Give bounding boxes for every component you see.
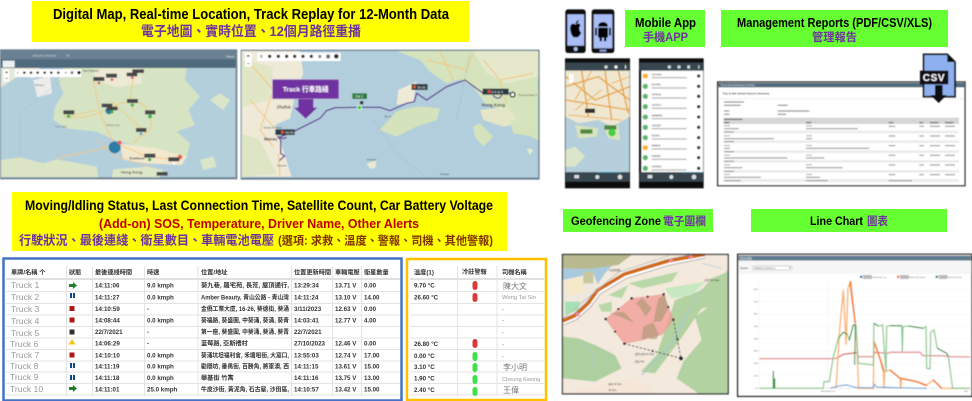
line chart: power signals: 26/1/2022 9:10	[821, 391, 836, 393]
screenshot: track replay map: Car 1	[355, 94, 363, 98]
callout: track route: Track 行車路綫	[283, 85, 329, 94]
alerts header: 司機名稱	[502, 268, 528, 276]
driver names: Wong Tai Sin	[502, 295, 536, 301]
screenshot: trip report: Trip & Idle Detail Report (Vehicle)	[721, 84, 755, 87]
line chart: power signals: 26/1	[964, 391, 969, 393]
map: geofence zone: 北潭 Pak Ngau	[704, 278, 720, 282]
line chart: power signals: 30.0	[754, 351, 759, 353]
line chart: power signals: Signals:	[740, 268, 749, 270]
table values: 14:10:57	[294, 386, 319, 394]
table values: 13.42 V	[335, 386, 357, 394]
line chart: power signals: 50.0	[754, 326, 759, 328]
screenshot: live location map: All	[66, 54, 70, 58]
truck names	[10, 280, 43, 394]
alerts header	[414, 268, 528, 276]
table values: 25.0 kmph	[147, 386, 177, 394]
table header: 車牌/名稱 个	[11, 268, 46, 276]
heading: mobile app: 手機APP	[643, 30, 688, 44]
table values: 12.74 V	[335, 352, 357, 360]
screenshot: track replay map: Coloane	[277, 164, 287, 168]
banner: status heading: Moving/Idling Status, Last Connection Time, Satellite Count, Car Battery Voltage	[25, 198, 493, 213]
truck names: Truck 10	[10, 384, 43, 394]
map: geofence zone: Tai Tam	[608, 390, 616, 392]
table values: 12.63 V	[335, 306, 357, 313]
table values: 14:03:41	[294, 318, 319, 324]
table header: 時速	[147, 268, 160, 276]
driver names: -	[502, 307, 504, 313]
table values: -	[147, 340, 149, 348]
table values: 9.0 kmph	[147, 282, 174, 290]
table values: 12.77 V	[335, 318, 357, 324]
driver names: 王偉	[503, 385, 519, 395]
screenshot: track replay map: Tai O	[384, 114, 392, 118]
icon: iPhone	[565, 9, 586, 53]
table values: 22/7/2021	[294, 329, 322, 336]
screenshot: mobile vehicle list: VN5027	[652, 123, 662, 127]
table values: 14:11:15	[294, 364, 319, 370]
table values	[95, 282, 380, 394]
screenshot: live location map: Hong Kong	[121, 169, 143, 174]
table values: 22/7/2021	[95, 329, 123, 336]
heading: management reports: Management Reports (PDF/CSV/XLS)	[737, 16, 932, 30]
heading: geofencing zone	[563, 209, 713, 232]
table values: 0.0 kmph	[147, 318, 174, 324]
heading: line chart: Line Chart	[810, 214, 863, 228]
heading: line chart	[751, 209, 947, 232]
table header: 衛星數量	[364, 268, 389, 276]
driver names	[502, 281, 540, 395]
screenshot: mobile vehicle list: VP5020	[652, 93, 662, 97]
temperature values: 3.10 °C	[414, 364, 435, 371]
table values: 葵涌坑坦福利會, 禾塘咀街, 大窩口,	[201, 352, 289, 360]
screenshot: live location map: Shekou	[35, 83, 45, 87]
screenshot: mobile vehicle list: VN7671	[652, 103, 662, 107]
line chart: power signals: 70.0	[754, 301, 759, 303]
screenshot: trip report: Trip & Idle Detail Report (Vehicle)	[722, 92, 769, 96]
map: geofence zone: 城門水塘 Kai Shan	[635, 352, 655, 356]
table values: 15.00	[364, 364, 380, 370]
table values: 3/11/2023	[294, 306, 322, 313]
map: geofence zone: 石崗軍營路	[609, 268, 621, 272]
table values: 14:11:18	[95, 375, 120, 382]
screenshot: track replay map: Nossa Senhora	[263, 126, 282, 130]
screenshot: track replay map: Hong Kong	[482, 103, 505, 108]
table values: Amber Beauty, 青山公路 - 青山灣	[201, 294, 289, 302]
table values: 金僑工業大廈, 16-26, 葵德街, 葵涌	[201, 305, 289, 313]
table values: 14:11:19	[95, 364, 120, 370]
table values: 13.75 V	[335, 375, 357, 382]
table values: 14:06:29	[95, 340, 120, 348]
temperature values: 26.80 °C	[414, 341, 439, 348]
screenshot: track replay map: Guishan	[367, 158, 377, 162]
truck names: Truck 6	[10, 339, 39, 349]
table values: 14:10:59	[95, 306, 120, 313]
alerts header: 溫度(1)	[414, 268, 434, 276]
icon: CSV download	[920, 54, 955, 103]
table header: 車輛電壓	[335, 268, 360, 276]
screenshot: live location map: Tuen Mun	[55, 124, 67, 128]
table values: 13:29:34	[294, 282, 319, 290]
table header: 位置/地址	[201, 268, 228, 276]
line chart: power signals: SolarCell_Current_A	[754, 267, 776, 270]
screenshot: live location map: Sai District	[83, 69, 99, 73]
table values: 13:55:03	[294, 352, 319, 360]
truck names: Truck 5	[11, 328, 40, 338]
screenshot: track replay map: Dangan	[440, 172, 450, 176]
table values: 27/10/2023	[294, 340, 326, 348]
truck names: Truck 1	[11, 280, 40, 290]
banner: status heading: (選項: 求救、溫度、警報、司機、其他警報)	[278, 234, 493, 248]
table values: 14:11:24	[294, 294, 319, 302]
screenshot: mobile vehicle list: VN7418	[652, 72, 662, 76]
screenshot: mobile vehicle list: HM308	[652, 154, 661, 158]
panel: add-on alerts table	[407, 259, 546, 400]
driver names: -	[502, 342, 504, 348]
table values: -	[147, 329, 149, 336]
screenshot: trip report	[718, 82, 965, 186]
truck names: Truck 7	[11, 350, 40, 360]
driver names: -	[502, 330, 504, 336]
truck names: Truck 9	[10, 372, 39, 382]
screenshot: track replay map: 3H 9S	[285, 130, 294, 134]
table values: 0.00	[364, 340, 377, 348]
truck names: Truck 4	[11, 316, 40, 326]
alerts header: 冷莊警報	[462, 268, 488, 276]
banner: status heading: (Add-on) SOS, Temperature, Driver Name, Other Alerts	[99, 216, 419, 231]
table values: 牛皮沙街, 黃泥角, 石古壟, 沙田區,	[201, 386, 289, 394]
heading: mobile app	[625, 10, 705, 47]
table values: 葵九巷, 羅宅苑, 長荒, 屋頂通行,	[201, 282, 289, 290]
heading: mobile app: Mobile App	[635, 16, 696, 30]
table values: 14:10:10	[95, 352, 120, 360]
temperature values	[414, 282, 439, 394]
line chart: power signals	[738, 254, 972, 396]
status icons	[68, 282, 77, 392]
banner: status heading: 行駛狀況、最後連綫、衛星數目、車輛電池電壓	[19, 232, 274, 248]
table values: 17.00	[364, 352, 380, 360]
table values: 0.0 kmph	[147, 375, 174, 382]
screenshot: live location map: Sample Customer	[33, 54, 57, 58]
screenshot: mobile vehicle list: MM8058	[652, 113, 663, 117]
driver names: -	[502, 354, 504, 360]
table values: -	[147, 306, 149, 313]
banner: digital map heading	[32, 1, 469, 42]
table values: 14:11:01	[95, 386, 120, 394]
panel: vehicle status table	[4, 258, 402, 400]
screenshot: live location map: Kowloon	[129, 156, 145, 160]
line chart: power signals: 40.0	[754, 338, 759, 340]
table values: 13.10 V	[335, 294, 357, 302]
screenshot: mobile map view	[565, 58, 630, 188]
banner: digital map heading: 電子地圖、實時位置、12個月路徑重播	[141, 23, 361, 39]
chart legend: SolarCell_Power	[909, 276, 926, 279]
screenshot: track replay map	[241, 50, 540, 180]
icon: CSV download: CSV	[923, 73, 945, 84]
chart legend: SolarCell_Curr	[873, 276, 887, 279]
table values: 華基街 竹寓	[201, 374, 234, 382]
table values: 0.0 kmph	[147, 352, 174, 360]
table header: 最後連綫時間	[95, 268, 132, 276]
screenshot: mobile vehicle list: MM816	[652, 144, 661, 148]
truck names: Truck 2	[11, 292, 40, 302]
heading: geofencing zone: 電子圍欄	[663, 214, 706, 228]
screenshot: mobile vehicle list: VN2936	[652, 165, 662, 169]
map: geofence zone: 標高 455	[635, 359, 645, 363]
table values: 15.00	[364, 386, 380, 394]
driver names: Cheung Kwong	[502, 377, 540, 383]
chart legend: SolarCell_Volt	[948, 276, 962, 279]
heading: management reports	[721, 10, 948, 47]
table header	[11, 268, 389, 276]
table values: 14.00	[364, 294, 380, 302]
table values: 13.61 V	[335, 364, 357, 370]
screenshot: mobile vehicle list	[639, 58, 704, 188]
table values: 13.71 V	[335, 282, 357, 290]
line chart: power signals: 10.0	[754, 375, 759, 377]
table values: 12.46 V	[335, 340, 357, 348]
screenshot: track replay map: Macau	[264, 137, 278, 142]
table header: 位置更新時間	[294, 268, 331, 276]
temperature values: 2.40 °C	[414, 387, 435, 394]
line chart: power signals: 圖表視圖	[740, 255, 752, 260]
table values: 蓝莓路, 亞斯禮村	[201, 340, 249, 348]
heading: geofencing zone: Geofencing Zone	[571, 214, 661, 228]
table values: 0.00	[364, 306, 377, 313]
line chart: power signals: 60.0	[754, 314, 759, 316]
truck names: Truck 3	[11, 304, 40, 314]
table values: 葵福路, 葵盛圍, 中葵涌, 葵涌, 葵青	[201, 316, 289, 324]
banner: status heading	[12, 192, 507, 251]
table values: 勸隱坊, 番禺街, 百勝角, 將軍澳, 西	[201, 362, 289, 370]
driver names: 陳大文	[503, 281, 527, 291]
table values: 0.0 kmph	[147, 364, 174, 370]
map: geofence zone	[562, 254, 728, 394]
heading: management reports: 管理報告	[812, 30, 857, 44]
table values: 14:11:16	[294, 375, 319, 382]
table values: 13.00	[364, 375, 380, 382]
temperature values: 9.70 °C	[414, 282, 435, 290]
heading: line chart: 圖表	[867, 214, 888, 228]
temperature values: 0.00 °C	[414, 353, 435, 360]
line chart: power signals: 90.0	[754, 289, 759, 291]
screenshot: track replay map: Zhuhai	[277, 104, 291, 109]
line chart: power signals: 0.0	[755, 388, 759, 390]
table values: 14:08:44	[95, 318, 120, 324]
screenshot: live location map: Ching Lung	[106, 123, 120, 127]
table values: 第一座, 葵盛圍, 中葵涌, 葵涌, 葵青	[201, 328, 289, 336]
screenshot: track replay map: 5h 9S	[418, 85, 425, 89]
screenshot: live location map: Status	[226, 54, 235, 58]
table values: 14:11:27	[95, 294, 120, 302]
line chart: power signals: 20.0	[754, 363, 759, 365]
screenshot: live location map	[0, 49, 237, 179]
chart legend	[860, 275, 962, 279]
temperature values: 1.90 °C	[414, 376, 435, 382]
table values: 4.00	[364, 318, 377, 324]
alarm indicators	[472, 281, 478, 396]
driver names: 李小明	[503, 363, 527, 372]
table values: 14:11:06	[95, 282, 120, 290]
temperature values: 26.60 °C	[414, 294, 439, 302]
truck names: Truck 8	[10, 361, 39, 371]
banner: digital map heading: Digital Map, Real-time Location, Track Replay for 12-Month Data	[53, 7, 450, 23]
screenshot: mobile vehicle list: MJ7561	[652, 83, 662, 87]
callout: track route	[272, 79, 339, 119]
map: geofence zone: 林村 Tai Tam	[608, 382, 622, 386]
driver names: -	[502, 318, 504, 324]
screenshot: track replay map: 5 H 11 S	[492, 90, 503, 94]
screenshot: mobile vehicle list: KZ202	[652, 134, 660, 138]
screenshot: track replay map: Tseung Kwan O	[518, 93, 537, 97]
icon: Android phone	[592, 9, 614, 53]
table header: 狀態	[69, 268, 81, 276]
table values: 0.00	[364, 282, 377, 290]
table values: 0.0 kmph	[147, 294, 174, 302]
